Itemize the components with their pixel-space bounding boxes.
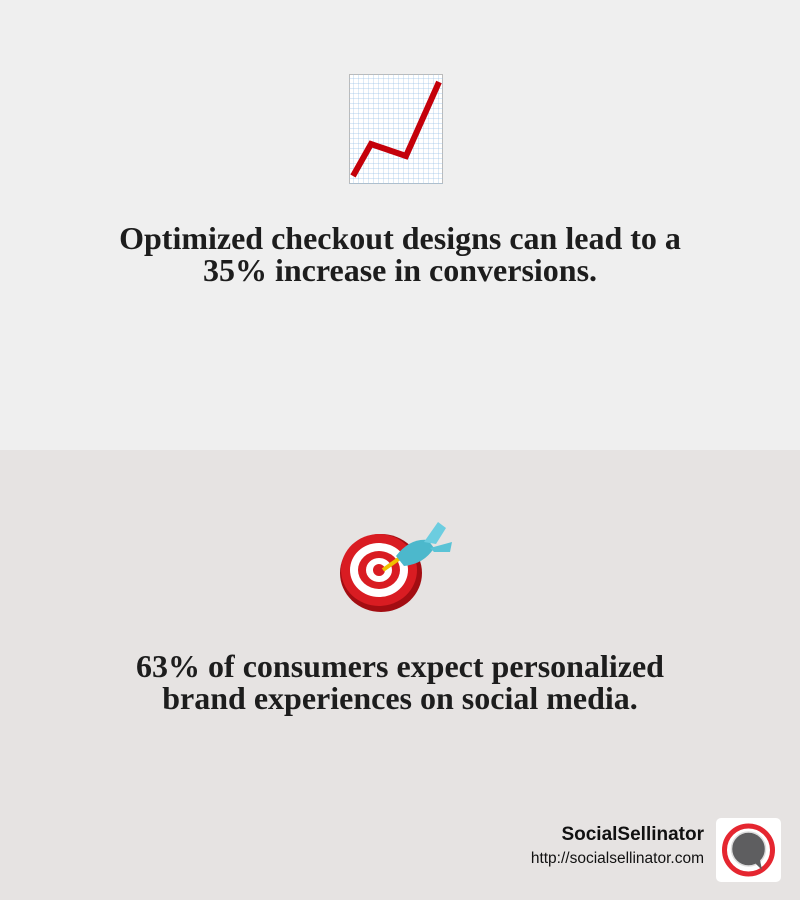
icon: logo [716,818,781,882]
text: brand name and url: http://socialsellinator.com [531,850,704,867]
icon: rising chart [349,74,443,184]
heading: checkout stat text: 35% increase in conversions. [203,252,597,288]
heading: personalization stat text [136,648,664,716]
heading: checkout stat text [119,220,681,288]
heading: personalization stat text: brand experiences on social media. [162,680,638,716]
panel: checkout stat [0,0,800,450]
panel: personalization stat [0,450,800,900]
heading: personalization stat text: 63% of consumers expect personalized [136,648,664,684]
heading: checkout stat text: Optimized checkout designs can lead to a [119,220,681,256]
icon: target with dart [340,522,452,612]
text: brand name and url [531,824,704,867]
text: brand name and url: SocialSellinator [561,824,704,845]
